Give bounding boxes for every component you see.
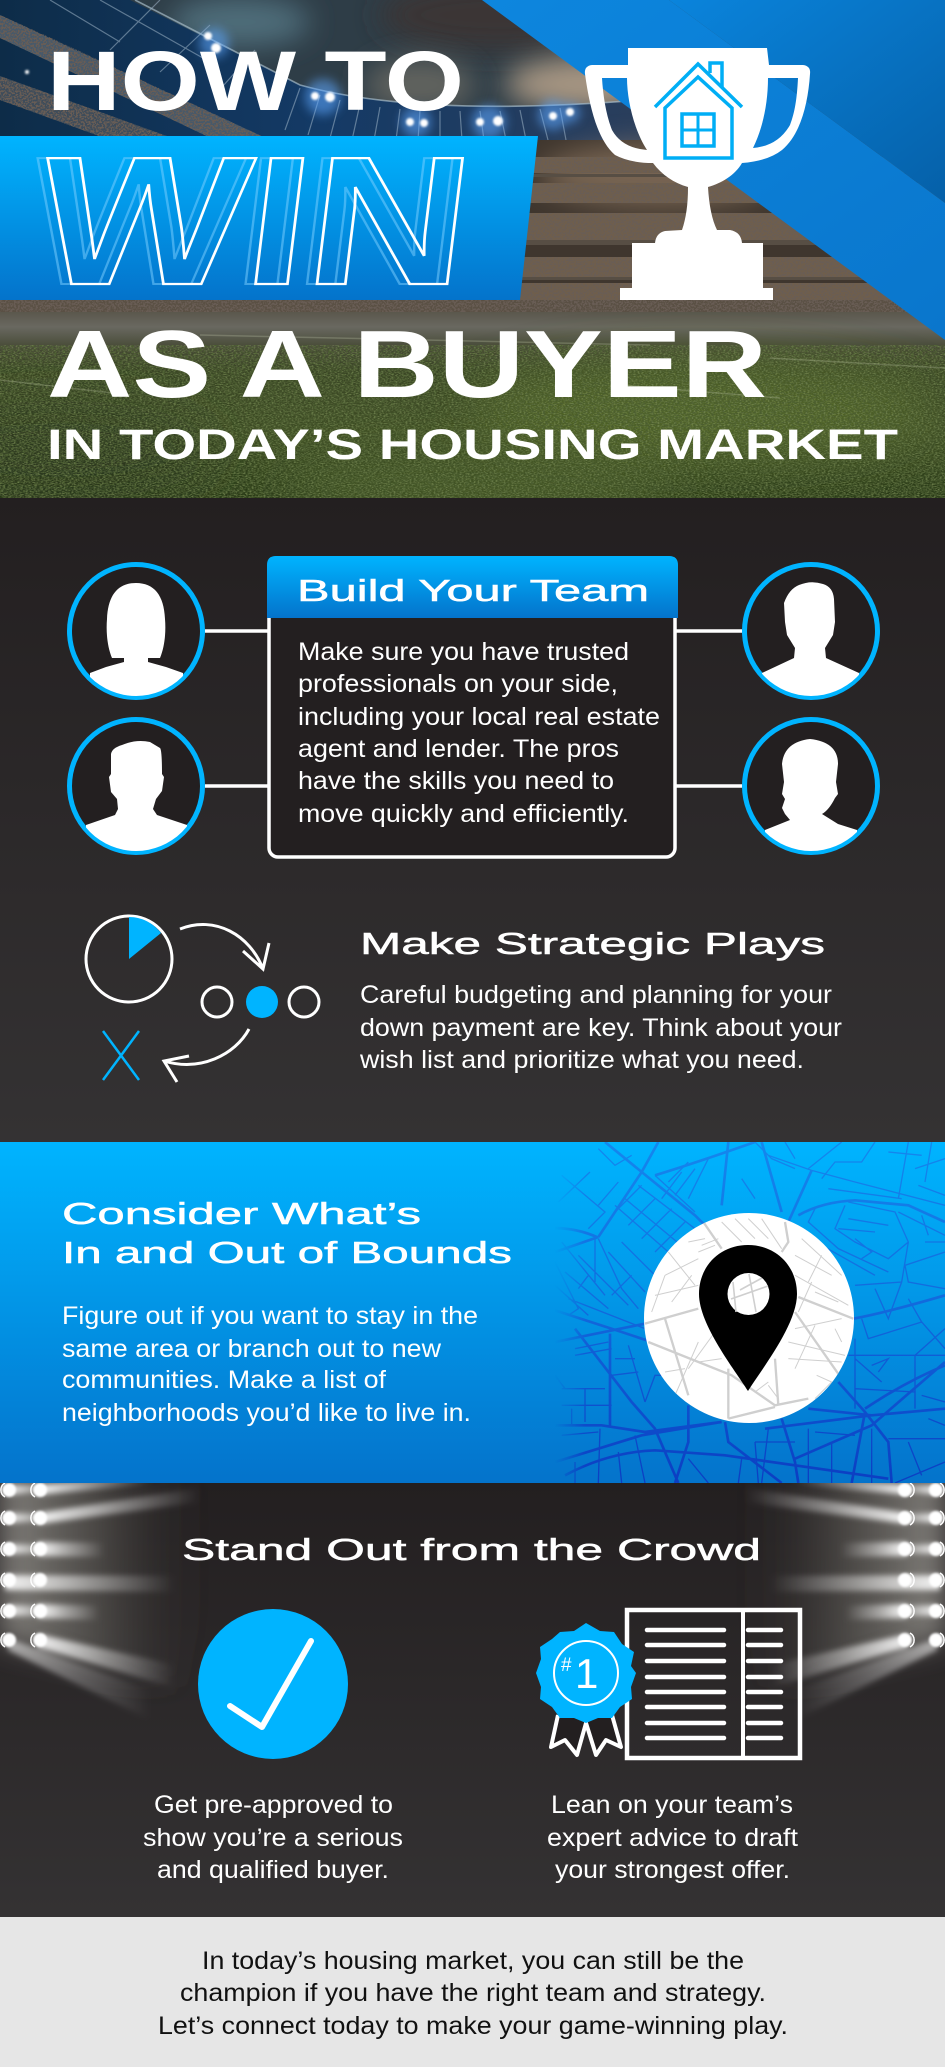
heading: stand out from the crowd: Stand Out from the Crowd bbox=[182, 1532, 761, 1567]
title word: win, outlined bbox=[36, 157, 464, 286]
panel: closing call to action: Let’s connect today to make your game-winning play. bbox=[158, 2012, 788, 2040]
heading: consider what's in and out of bounds: In and Out of Bounds bbox=[62, 1235, 512, 1270]
icon: number one ribbon badge: 1 bbox=[575, 1650, 598, 1697]
arrow: curved to the x bbox=[164, 1029, 249, 1082]
heading bar: build your team: Build Your Team bbox=[297, 573, 649, 608]
icon: check mark in blue circle bbox=[198, 1609, 348, 1759]
body text: bounds bbox=[62, 1302, 478, 1427]
text: get pre-approved: show you’re a serious bbox=[143, 1824, 403, 1852]
blue ribbon behind win bbox=[0, 136, 538, 300]
panel: closing call to action bbox=[0, 1917, 945, 2067]
icon: team member, woman with long hair bbox=[70, 564, 202, 701]
icon: clock circle with wedge bbox=[86, 916, 172, 1002]
title line: how to: HOW TO bbox=[47, 34, 464, 128]
heading: make strategic plays: Make Strategic Plays bbox=[360, 926, 825, 961]
body text: make strategic plays: wish list and prioritize what you need. bbox=[359, 1046, 804, 1074]
body text: bounds: neighborhoods you’d like to live in. bbox=[62, 1399, 471, 1427]
panel: closing call to action: In today’s housing market, you can still be the bbox=[202, 1947, 744, 1975]
map lines background bbox=[555, 1142, 945, 1483]
trophy with house bbox=[585, 48, 810, 300]
body text: make strategic plays: down payment are key. Think about your bbox=[360, 1014, 842, 1042]
body text: bounds: Figure out if you want to stay in the bbox=[62, 1302, 478, 1330]
title line: in today's housing market: IN TODAY’S HOUSING MARKET bbox=[47, 421, 898, 469]
body text: build your team: Make sure you have trusted bbox=[298, 638, 629, 666]
body text: bounds: communities. Make a list of bbox=[62, 1366, 386, 1394]
panel: build your team bbox=[267, 556, 678, 857]
body text: make strategic plays: Careful budgeting and planning for your bbox=[360, 981, 832, 1009]
icon: blue x bbox=[103, 1031, 139, 1080]
icon: number one ribbon badge bbox=[536, 1623, 636, 1755]
stadium photo background bbox=[0, 0, 945, 518]
icon: three player circles bbox=[202, 986, 319, 1018]
heading: consider what's in and out of bounds: Consider What’s bbox=[62, 1196, 421, 1231]
body text: build your team: move quickly and efficiently. bbox=[298, 800, 629, 828]
panel: closing call to action: champion if you have the right team and strategy. bbox=[180, 1979, 766, 2007]
connector lines bbox=[205, 631, 742, 786]
text: get pre-approved: Get pre-approved to bbox=[154, 1791, 393, 1819]
icon: team member, man bbox=[70, 720, 202, 856]
body text: make strategic plays bbox=[359, 981, 842, 1074]
icon: black location pin bbox=[699, 1245, 797, 1391]
icon: offer document bbox=[627, 1610, 800, 1758]
icon: team member, woman with hair up bbox=[744, 720, 878, 856]
icon: team member, man with tousled hair bbox=[744, 564, 878, 701]
icon: house bbox=[655, 63, 742, 158]
icon: game play diagram bbox=[86, 916, 319, 1082]
heading bar: build your team bbox=[267, 556, 678, 618]
arrow: curved to the players bbox=[180, 924, 269, 969]
header: stadium banner bbox=[0, 0, 945, 518]
text: get pre-approved bbox=[143, 1791, 403, 1884]
blue diagonal corner bands bbox=[482, 0, 945, 340]
panel: blue bounds section bbox=[0, 1142, 945, 1483]
title line: as a buyer: AS A BUYER bbox=[47, 311, 767, 418]
title word: win, outlined: WIN bbox=[17, 119, 472, 323]
text: lean on your team: expert advice to draft bbox=[547, 1824, 798, 1852]
text: lean on your team: your strongest offer. bbox=[555, 1856, 790, 1884]
panel: dark team and strategy section bbox=[0, 498, 945, 1142]
stadium lights, right bbox=[751, 1483, 945, 1710]
body text: build your team: have the skills you need to bbox=[298, 767, 614, 795]
icon: number one ribbon badge: # bbox=[561, 1655, 572, 1676]
body text: build your team: including your local real estate bbox=[298, 703, 660, 731]
text: get pre-approved: and qualified buyer. bbox=[157, 1856, 389, 1884]
icon: map circle with location pin bbox=[644, 1213, 854, 1423]
body text: build your team: agent and lender. The pros bbox=[298, 735, 619, 763]
body text: bounds: same area or branch out to new bbox=[62, 1335, 442, 1363]
text: lean on your team bbox=[547, 1791, 798, 1884]
stadium lights, left bbox=[0, 1483, 194, 1710]
body text: build your team: professionals on your side, bbox=[298, 670, 618, 698]
text: lean on your team: Lean on your team’s bbox=[551, 1791, 793, 1819]
heading: consider what's in and out of bounds bbox=[62, 1196, 512, 1270]
title word: win, outlined: WIN bbox=[27, 119, 482, 323]
body text: build your team bbox=[298, 638, 660, 828]
panel: dark stand out section bbox=[0, 1483, 945, 1917]
